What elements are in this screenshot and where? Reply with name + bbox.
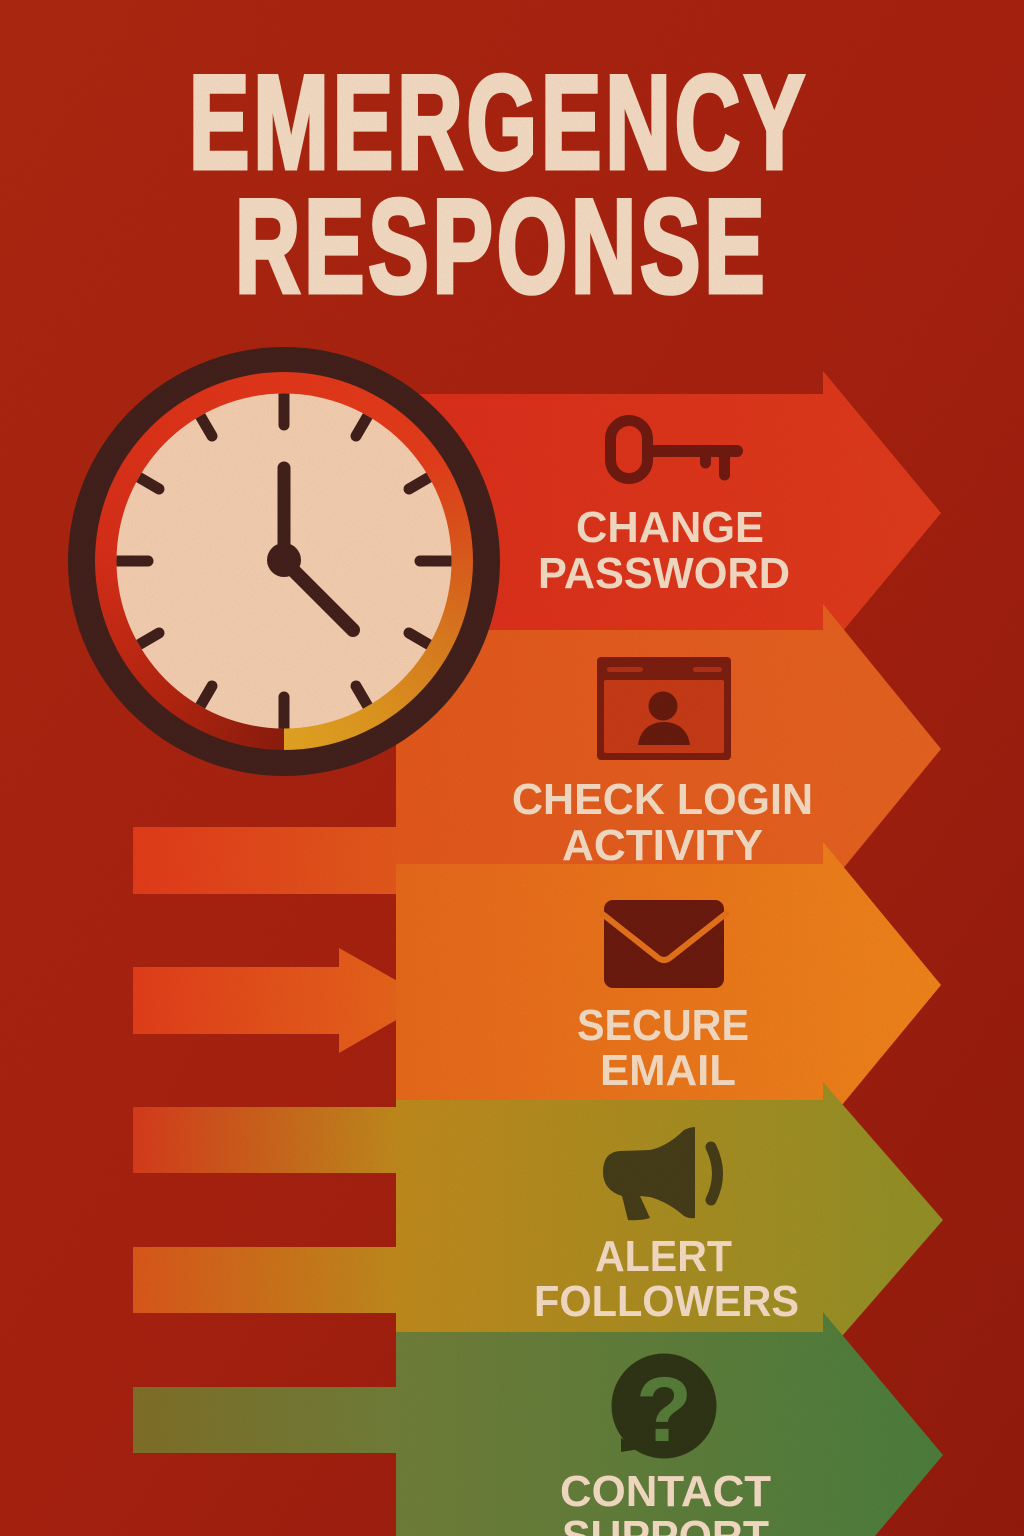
clock [68,347,500,776]
label: secure email: SECURE [577,1001,749,1050]
lower bar into arrow 4 [133,1247,403,1313]
title [189,49,809,321]
icon: key [610,420,743,481]
bar into arrow 5 [133,1387,403,1453]
label: alert followers [534,1232,799,1326]
upper bar into arrow 4 [133,1107,403,1173]
title: EMERGENCY [189,49,809,197]
arrow 4: alert followers [396,1082,943,1358]
icon: question bubble [612,1354,716,1461]
label: change password [538,503,790,598]
label: secure email [577,1001,749,1095]
clock progress ring [95,372,473,750]
clock face and hands [116,394,452,728]
icon: login window [597,657,731,760]
bar into arrow 2 [133,827,403,894]
label: check login activity [512,775,813,870]
label: change password: CHANGE [576,503,764,552]
arrow 2: check login activity [396,604,941,893]
icon: envelope [600,900,728,988]
arrow 1: change password [396,371,941,655]
title: RESPONSE [235,173,769,321]
label: check login activity: ACTIVITY [562,821,763,870]
label: secure email: EMAIL [600,1046,736,1095]
label: alert followers: FOLLOWERS [534,1277,799,1326]
icon: megaphone [603,1127,718,1220]
label: alert followers: ALERT [595,1232,732,1281]
icon: question bubble: ? [636,1359,692,1461]
small arrow into arrow 3 [133,948,431,1053]
label: check login activity: CHECK LOGIN [512,775,813,824]
clock bezel [68,347,500,776]
arrow 3: secure email [396,842,941,1128]
label: change password: PASSWORD [538,549,790,598]
label: contact support: CONTACT [560,1467,771,1516]
arrow 5: contact support [396,1312,943,1536]
